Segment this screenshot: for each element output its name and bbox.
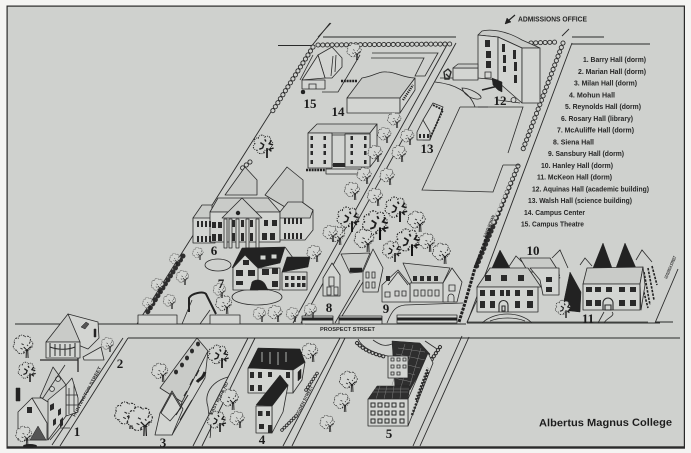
building numbers: 12 [494, 93, 506, 108]
street names: PROSPECT STREET [320, 327, 375, 333]
building 8: Siena Hall [302, 249, 383, 324]
street names: OGDEN STREET [294, 385, 314, 416]
building legend: 15. Campus Theatre [521, 220, 584, 228]
building numbers: 15 [304, 96, 317, 111]
building 6: Rosary Hall [193, 167, 313, 248]
building numbers: 3 [160, 435, 167, 450]
building legend: 5. Reynolds Hall (dorm) [565, 102, 642, 111]
building legend: 4. Mohun Hall [569, 90, 615, 100]
building numbers: 4 [259, 432, 266, 447]
building numbers: 9 [383, 301, 390, 316]
street names [71, 214, 677, 417]
building 9: Sansbury Hall [382, 263, 463, 323]
building 4: Mohun Hall [248, 348, 305, 433]
building 1: Barry Hall [16, 365, 78, 448]
building legend: 9. Sansbury Hall (dorm) [548, 149, 625, 158]
trees [13, 43, 450, 445]
building legend: 7. McAuliffe Hall (dorm) [557, 126, 635, 134]
building numbers: 7 [218, 276, 225, 291]
building numbers: 8 [326, 300, 333, 315]
building numbers: 1 [74, 424, 80, 439]
street names: SAINT RONAN [482, 214, 496, 238]
building 11: McKeon Hall [583, 267, 645, 323]
building 12: Aquinas Hall [444, 30, 540, 103]
building numbers: 14 [332, 104, 345, 119]
building legend: 10. Hanley Hall (dorm) [541, 161, 614, 170]
building legend: 3. Milan Hall (dorm) [574, 78, 638, 88]
building legend: 8. Siena Hall [553, 138, 594, 146]
building numbers: 11 [582, 311, 594, 326]
small shrub hedges by 4 [282, 372, 318, 430]
college title: Albertus Magnus College [539, 417, 672, 429]
building legend: 2. Marian Hall (dorm) [578, 67, 647, 76]
building legend: 6. Rosary Hall (library) [561, 114, 634, 123]
building legend: 14. Campus Center [524, 208, 585, 217]
hedges along campus edges [147, 42, 563, 322]
building numbers: 5 [386, 426, 393, 441]
central lawn and driveway [300, 53, 523, 192]
building legend [521, 55, 650, 228]
dark pines behind 10 and 11 [492, 243, 657, 318]
building legend: 11. McKeon Hall (dorm) [537, 172, 613, 182]
building numbers: 13 [420, 141, 434, 156]
building 3: Milan Hall [155, 338, 228, 438]
building 13: Walsh Hall [417, 103, 443, 140]
building numbers: 10 [526, 243, 540, 258]
building 14: Campus Center [341, 72, 415, 113]
street names: HUNTINGTON STREET [71, 365, 102, 417]
admissions office pointer: ADMISSIONS OFFICE [518, 14, 587, 24]
building numbers: 2 [117, 356, 123, 371]
building legend: 13. Walsh Hall (science building) [528, 196, 633, 205]
building 5: Reynolds Hall [357, 339, 440, 426]
building legend: 12. Aquinas Hall (academic building) [532, 184, 650, 194]
arched gate [138, 293, 240, 324]
street names: EAST ROCK RD [208, 381, 229, 415]
building 10: Hanley Hall [467, 258, 648, 323]
building 2: Marian Hall [40, 314, 104, 372]
building numbers: 6 [211, 243, 218, 258]
unnamed residence beside building 14 [306, 124, 377, 174]
building numbers [74, 93, 594, 450]
street names: GOODRICH STREET [663, 255, 677, 279]
building legend: 1. Barry Hall (dorm) [583, 55, 647, 64]
building 7: McAuliffe Hall [205, 247, 310, 305]
building 15: Campus Theatre [301, 47, 342, 94]
